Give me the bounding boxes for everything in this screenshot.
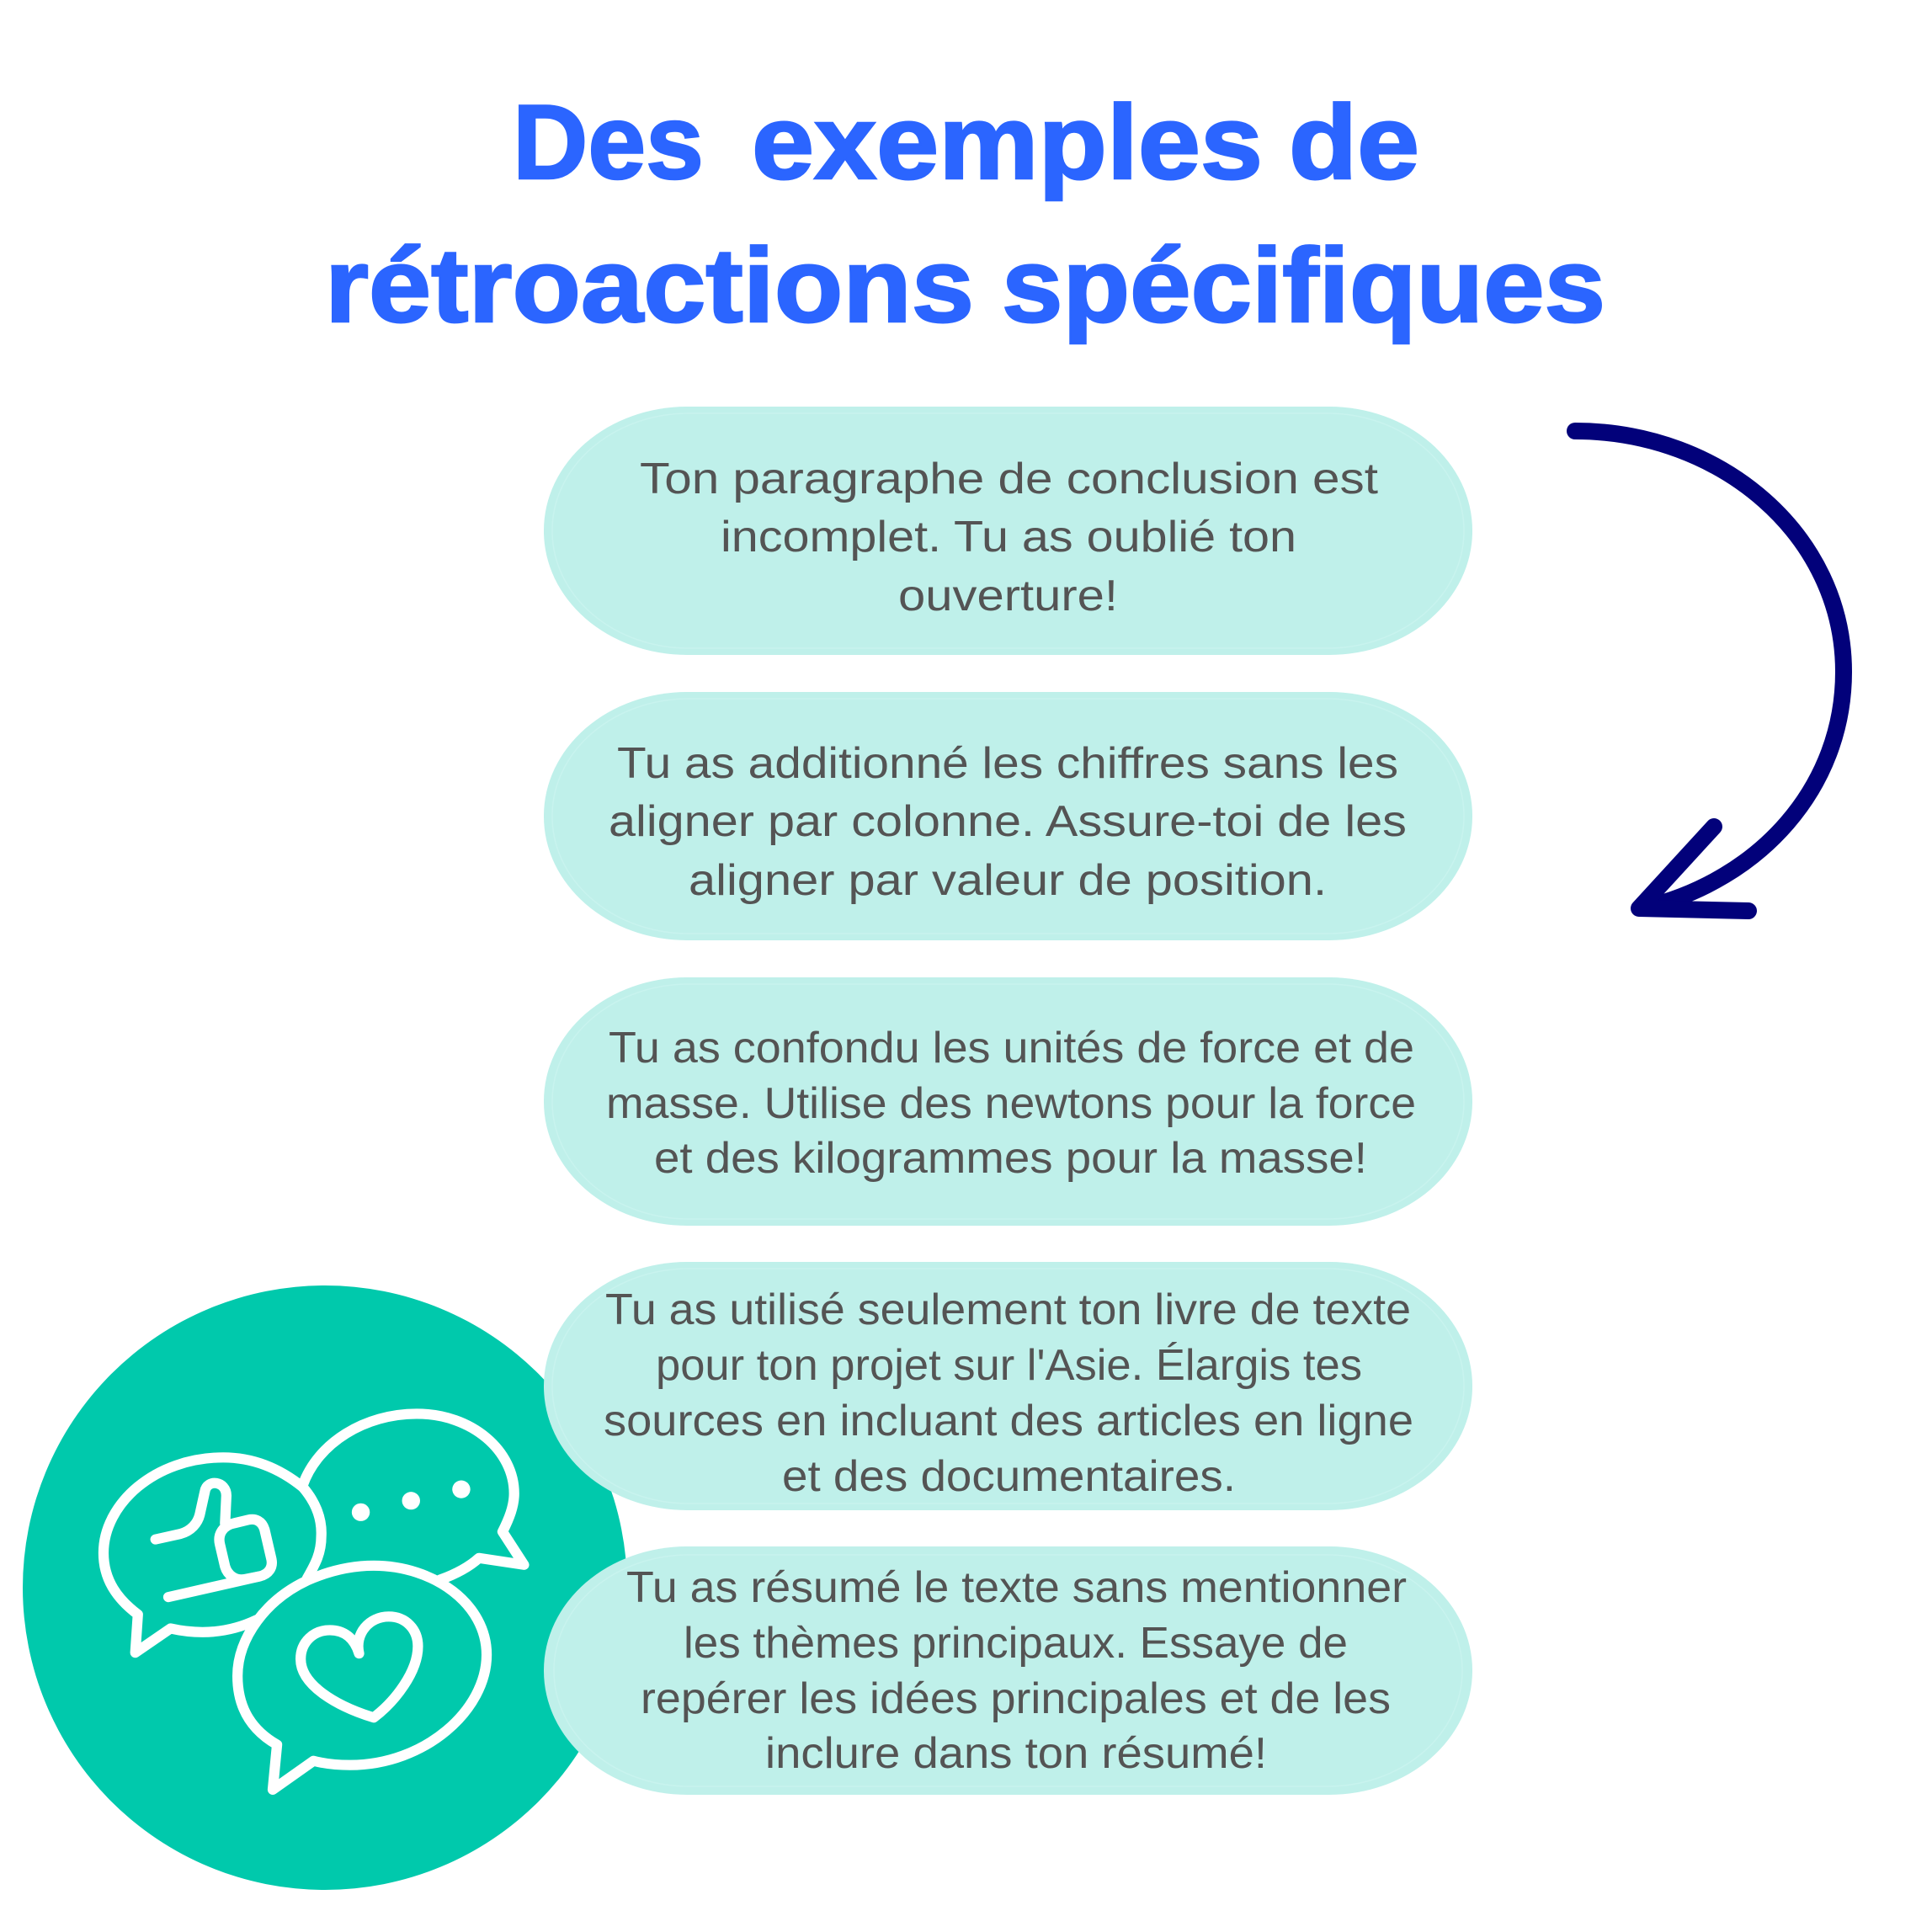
icon: teal circle with speech bubbles (23, 1285, 627, 1890)
panel: example 2: Tu as additionné les chiffres sans les (617, 739, 1398, 788)
panel: example 4 (544, 1262, 1472, 1510)
panel: example 4: et des documentaires. (782, 1452, 1236, 1501)
panel: example 4: sources en incluant des articles en ligne (604, 1397, 1413, 1445)
panel: example 4: Tu as utilisé seulement ton livre de texte (605, 1285, 1411, 1334)
title: Des (513, 84, 704, 201)
panel: example 5: les thèmes principaux. Essaye de (684, 1619, 1348, 1668)
panel: example 5 (544, 1546, 1472, 1795)
icon: thumbs-up bubble (104, 1457, 322, 1653)
icon: curved arrow (1575, 431, 1844, 911)
panel: example 2: aligner par valeur de position. (689, 856, 1327, 905)
panel: example 5: Tu as résumé le texte sans mentionner (626, 1563, 1407, 1612)
panel: example 3: Tu as confondu les unités de force et de (609, 1024, 1414, 1072)
panel: example 3 (544, 977, 1472, 1226)
panel: example 1: ouverture! (898, 572, 1118, 620)
panel: example 3: et des kilogrammes pour la masse! (654, 1134, 1367, 1183)
icon: speech bubbles (104, 1413, 524, 1790)
title: rétroactions (325, 227, 974, 344)
panel: example 5: repérer les idées principales et de les (641, 1674, 1391, 1723)
panel: example 2: aligner par colonne. Assure-toi de les (609, 797, 1407, 846)
panel: example 2 (544, 692, 1472, 940)
icon: heart bubble (237, 1566, 487, 1790)
panel: example 1: Ton paragraphe de conclusion est (640, 455, 1379, 503)
panel: example 1 (544, 407, 1472, 655)
title: exemples (752, 84, 1263, 201)
title: spécifiques (1002, 227, 1605, 344)
panel: example 3: masse. Utilise des newtons pour la force (606, 1079, 1416, 1128)
title (325, 84, 1605, 344)
icon: ellipsis bubble (303, 1413, 524, 1579)
panel: example 1: incomplet. Tu as oublié ton (721, 513, 1296, 562)
title: de (1289, 84, 1419, 201)
panel: example 5: inclure dans ton résumé! (765, 1729, 1267, 1778)
panel: example 4: pour ton projet sur l'Asie. Élargis tes (656, 1341, 1362, 1390)
